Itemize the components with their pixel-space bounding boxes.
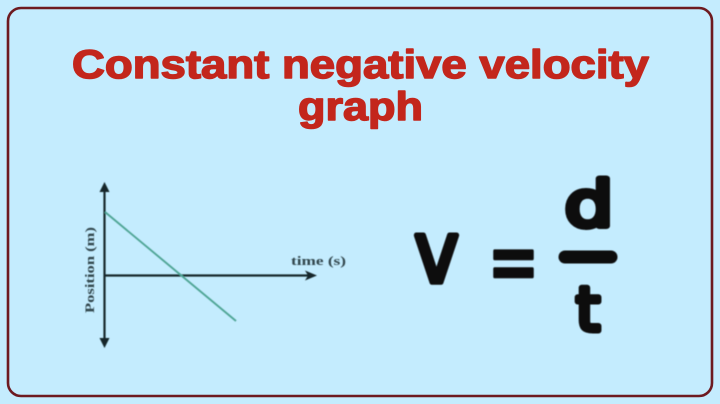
fraction numerator d: d bbox=[565, 168, 613, 241]
chart: position vs time graph bbox=[82, 182, 346, 348]
title: Constant negative velocity bbox=[72, 43, 650, 87]
x axis label: time (s) bbox=[291, 253, 346, 268]
fraction denominator t: t bbox=[576, 274, 600, 346]
title bbox=[72, 43, 650, 129]
formula: v = d / t bbox=[414, 168, 613, 346]
equals sign: = bbox=[488, 209, 539, 314]
horizontal axis with arrow bbox=[104, 270, 317, 280]
negative slope line bbox=[105, 212, 236, 321]
fraction bar bbox=[565, 250, 611, 264]
formula letter v: v bbox=[414, 203, 459, 303]
vertical axis with arrows bbox=[100, 182, 110, 348]
title: graph bbox=[298, 85, 423, 129]
y axis label: Position (m) bbox=[82, 227, 97, 313]
